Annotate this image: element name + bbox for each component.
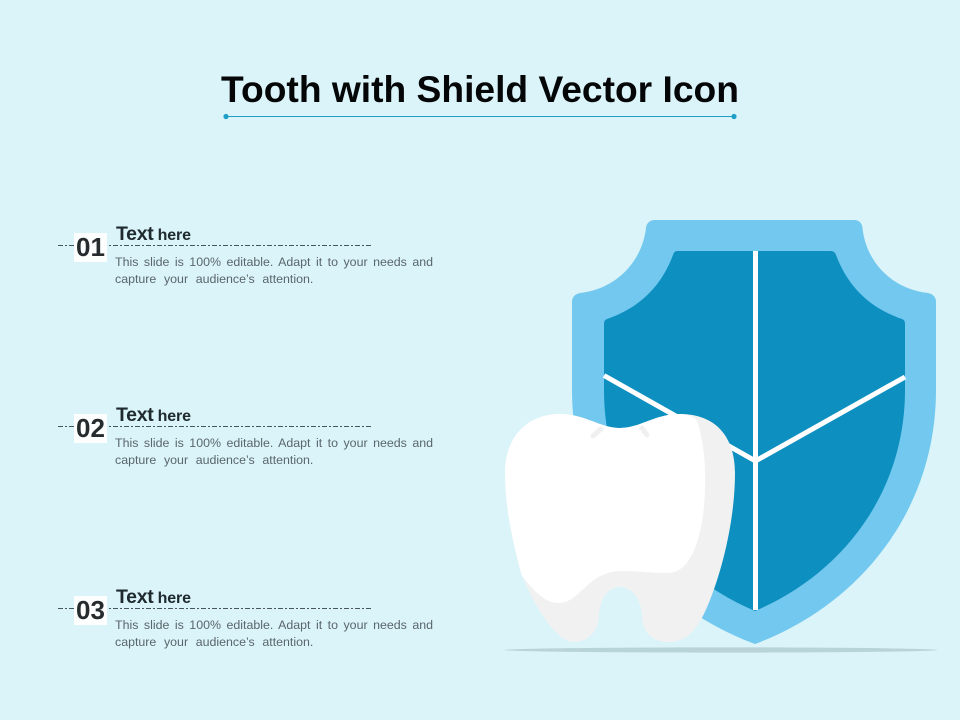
- description 01: capture your audience’s attention.: [115, 272, 313, 286]
- description 03: capture your audience’s attention.: [115, 634, 313, 648]
- description 03: This slide is 100% editable. Adapt it to your needs and: [115, 618, 433, 632]
- description 02: This slide is 100% editable. Adapt it to your needs and: [115, 436, 433, 450]
- heading 03: Text here: [116, 586, 191, 608]
- number 03: 03: [76, 595, 105, 625]
- description 02: capture your audience’s attention.: [115, 452, 313, 466]
- tooth shaded body: [505, 414, 735, 642]
- description 01: [115, 255, 433, 286]
- number 02: 02: [76, 413, 105, 443]
- shield outer frame: [572, 220, 936, 644]
- title underline: [223, 114, 737, 120]
- title: Tooth with Shield Vector Icon: [221, 68, 739, 110]
- description 01: This slide is 100% editable. Adapt it to your needs and: [115, 255, 433, 269]
- icon: shield: [572, 220, 936, 644]
- tooth highlight: [505, 414, 705, 603]
- tooth crease marks: [593, 428, 647, 436]
- item 01: [58, 223, 433, 286]
- description 02: [115, 436, 433, 466]
- heading 01: Text here: [116, 223, 191, 245]
- heading 02: Text here: [116, 404, 191, 426]
- icon: tooth: [505, 414, 735, 642]
- number 01: 01: [76, 232, 105, 262]
- shield inner panel: [604, 251, 905, 611]
- ground shadow: [504, 647, 938, 653]
- shield dividing lines: [604, 251, 905, 610]
- item 03: [58, 586, 433, 648]
- description 03: [115, 618, 433, 648]
- item 02: [58, 404, 433, 466]
